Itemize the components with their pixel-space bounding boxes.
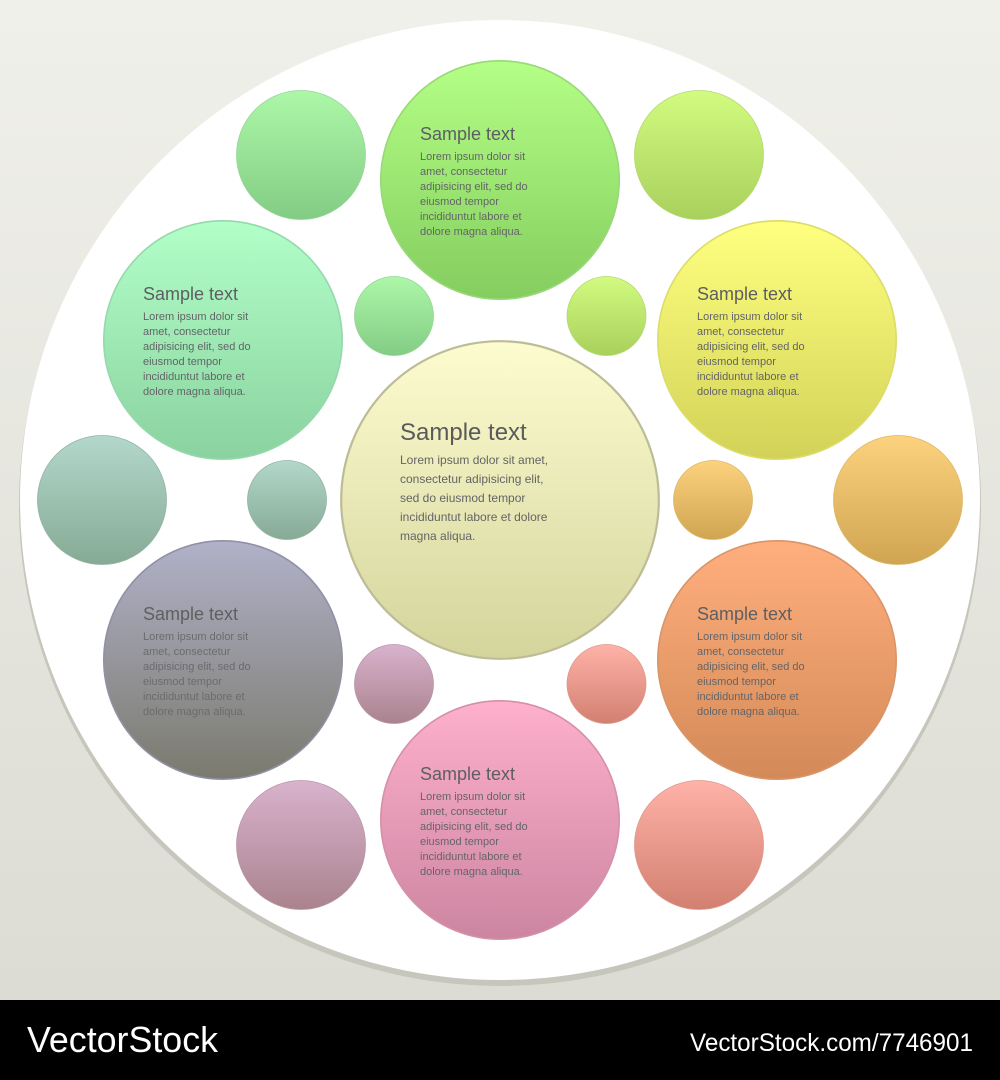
- panel: slate lower left: eiusmod tempor: [143, 676, 222, 688]
- tiny circle: lower left: [354, 644, 434, 724]
- panel: pink bottom: dolore magna aliqua.: [420, 866, 523, 878]
- panel: green top: [381, 61, 619, 299]
- panel: pink bottom: eiusmod tempor: [420, 836, 499, 848]
- panel: pink bottom: Lorem ipsum dolor sit: [420, 791, 525, 803]
- panel: orange lower right: [658, 541, 896, 779]
- panel: slate lower left: amet, consectetur: [143, 646, 231, 658]
- panel: green top: amet, consectetur: [420, 166, 508, 178]
- tiny circle: lower right: [567, 644, 646, 724]
- panel: yellow upper right: amet, consectetur: [697, 326, 785, 338]
- panel: green top: Lorem ipsum dolor sit: [420, 151, 525, 163]
- panel: mint upper left: Sample text: [143, 284, 238, 304]
- panel: slate lower left: incididuntut labore et: [143, 691, 245, 703]
- panel: pink bottom: amet, consectetur: [420, 806, 508, 818]
- panel: yellow upper right: dolore magna aliqua.: [697, 386, 800, 398]
- panel: yellow upper right: eiusmod tempor: [697, 356, 776, 368]
- panel: orange lower right: adipisicing elit, sed do: [697, 661, 805, 673]
- panel: center: Sample text: [400, 419, 527, 446]
- small circle: right: [834, 436, 962, 564]
- panel: orange lower right: amet, consectetur: [697, 646, 785, 658]
- panel: pink bottom: incididuntut labore et: [420, 851, 522, 863]
- panel: green top: dolore magna aliqua.: [420, 226, 523, 238]
- panel: center: magna aliqua.: [400, 529, 475, 543]
- panel: orange lower right: Sample text: [697, 604, 792, 624]
- panel: green top: incididuntut labore et: [420, 211, 522, 223]
- panel: orange lower right: Lorem ipsum dolor sit: [697, 631, 802, 643]
- panel: mint upper left: eiusmod tempor: [143, 356, 222, 368]
- panel: mint upper left: dolore magna aliqua.: [143, 386, 246, 398]
- panel: slate lower left: [104, 541, 342, 779]
- panel: slate lower left: Sample text: [143, 604, 238, 624]
- small circle: left: [38, 436, 166, 564]
- panel: center: incididuntut labore et dolore: [400, 510, 548, 524]
- tiny circle: left: [248, 460, 326, 540]
- panel: green top: adipisicing elit, sed do: [420, 181, 528, 193]
- panel: mint upper left: amet, consectetur: [143, 326, 231, 338]
- watermark bar: VectorStock.com/7746901: [690, 1029, 973, 1057]
- panel: slate lower left: adipisicing elit, sed do: [143, 661, 251, 673]
- tiny circle: upper right: [567, 276, 646, 356]
- panel: mint upper left: adipisicing elit, sed do: [143, 341, 251, 353]
- panel: pink bottom: Sample text: [420, 764, 515, 784]
- small circle: top left: [236, 90, 366, 220]
- watermark bar: VectorStock: [27, 1019, 219, 1060]
- panel: slate lower left: dolore magna aliqua.: [143, 706, 246, 718]
- panel: mint upper left: Lorem ipsum dolor sit: [143, 311, 248, 323]
- small circle: bottom right: [634, 780, 764, 910]
- small circle: bottom left: [236, 780, 366, 910]
- small circle: top right: [634, 90, 764, 220]
- panel: orange lower right: eiusmod tempor: [697, 676, 776, 688]
- panel: green top: eiusmod tempor: [420, 196, 499, 208]
- panel: orange lower right: incididuntut labore et: [697, 691, 799, 703]
- panel: center: Lorem ipsum dolor sit amet,: [400, 453, 548, 467]
- panel: yellow upper right: Sample text: [697, 284, 792, 304]
- panel: center: [341, 341, 659, 659]
- panel: mint upper left: [104, 221, 342, 459]
- panel: yellow upper right: adipisicing elit, sed do: [697, 341, 805, 353]
- panel: center: sed do eiusmod tempor: [400, 491, 525, 505]
- panel: center: consectetur adipisicing elit,: [400, 472, 543, 486]
- watermark bar: [0, 1000, 1000, 1080]
- panel: pink bottom: adipisicing elit, sed do: [420, 821, 528, 833]
- panel: green top: Sample text: [420, 124, 515, 144]
- panel: yellow upper right: [658, 221, 896, 459]
- panel: orange lower right: dolore magna aliqua.: [697, 706, 800, 718]
- tiny circle: upper left: [354, 276, 434, 356]
- tiny circle: right: [674, 460, 752, 540]
- panel: pink bottom: [381, 701, 619, 939]
- panel: yellow upper right: incididuntut labore et: [697, 371, 799, 383]
- panel: yellow upper right: Lorem ipsum dolor sit: [697, 311, 802, 323]
- panel: slate lower left: Lorem ipsum dolor sit: [143, 631, 248, 643]
- panel: mint upper left: incididuntut labore et: [143, 371, 245, 383]
